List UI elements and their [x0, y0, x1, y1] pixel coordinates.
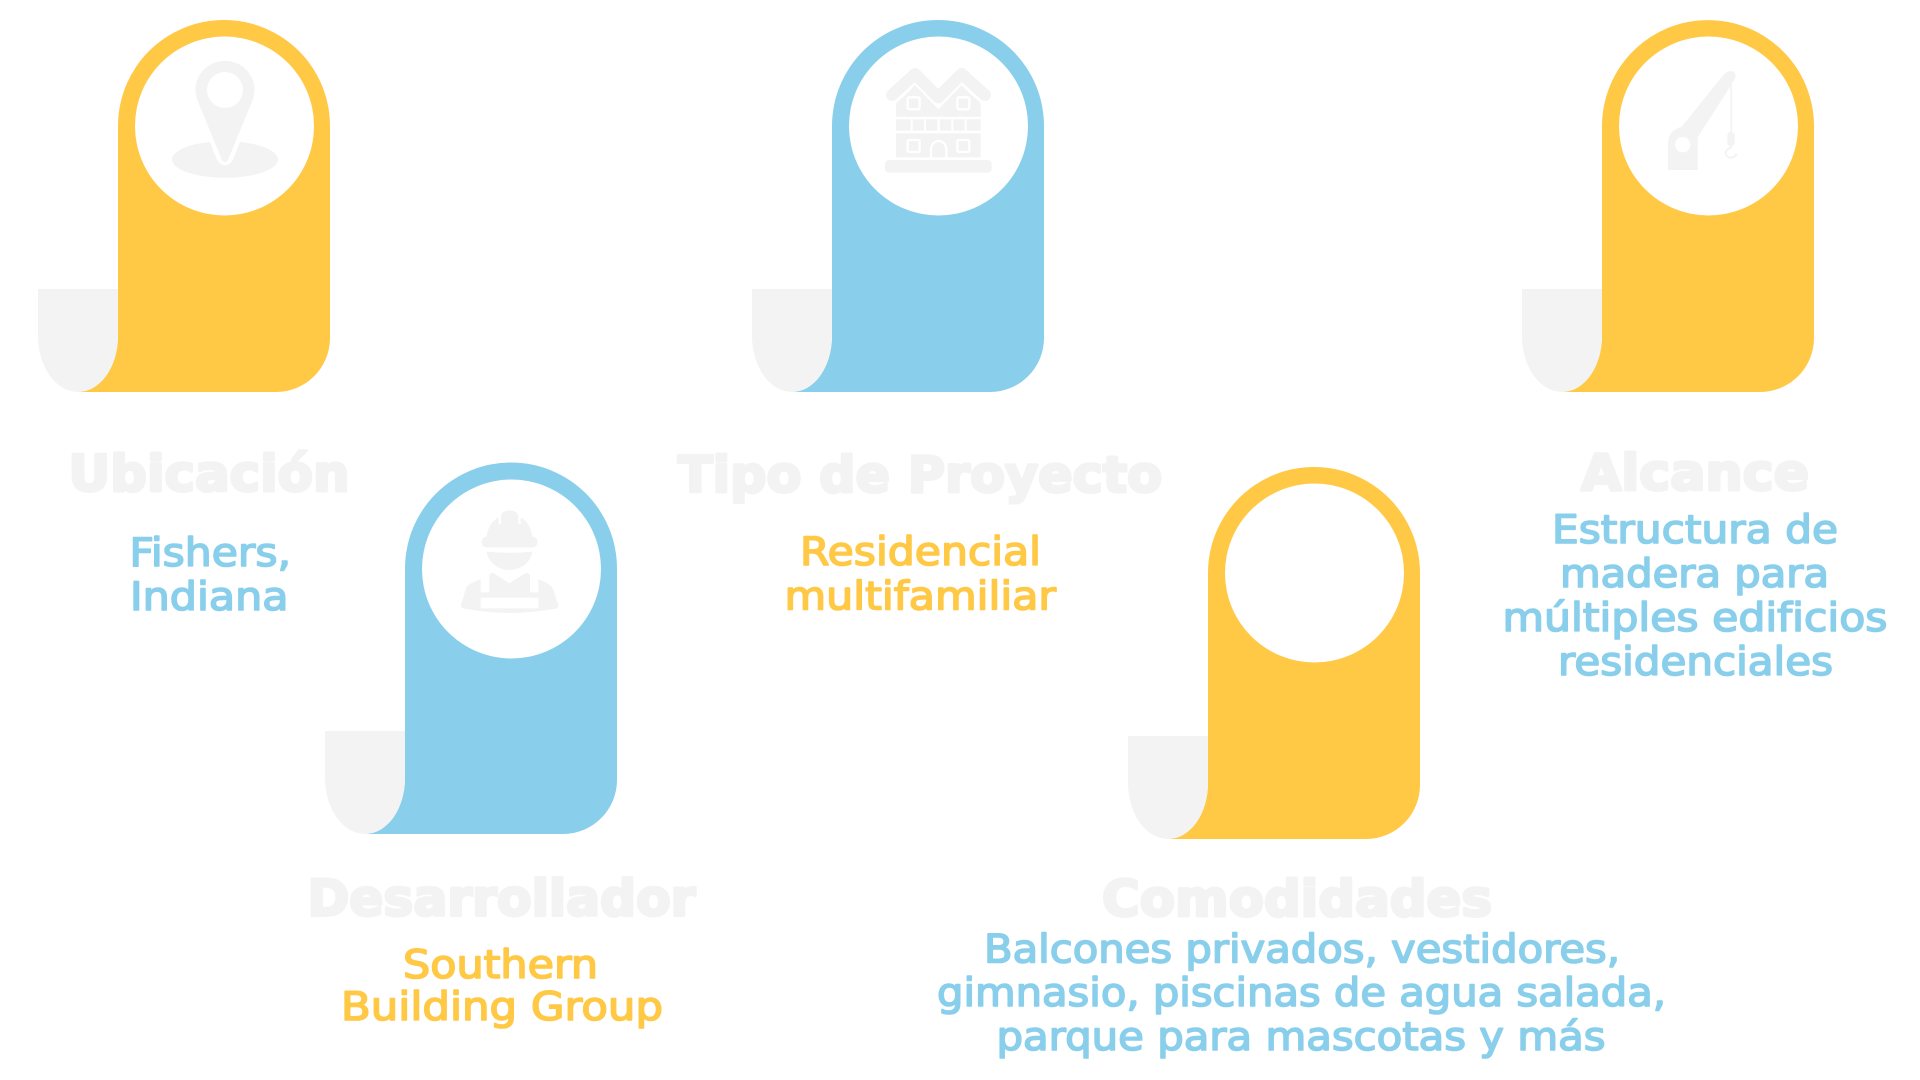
- text: Estructura de madera: múltiples edificios: [1502, 596, 1888, 641]
- icon: construction worker: [461, 511, 558, 613]
- scroll flap: [38, 289, 118, 392]
- icon: crane: [1668, 71, 1736, 170]
- text: Balcones privados list: gimnasio, piscinas de agua salada,: [937, 971, 1666, 1016]
- text: Fishers, Indiana: [130, 531, 291, 620]
- icon circle: [849, 36, 1028, 216]
- icon: house: [885, 74, 992, 173]
- panel: Tipo de Proyecto card: [752, 20, 1044, 392]
- icon circle: [135, 36, 314, 216]
- heading: Tipo de Proyecto: Tipo de Proyecto: [678, 446, 1162, 504]
- icon: map pin: [172, 60, 278, 178]
- panel: Desarrollador card: [325, 463, 617, 834]
- text: Southern Building Group: [341, 943, 663, 1030]
- text: Residencial multifamiliar: [784, 530, 1057, 620]
- scroll shape: [792, 20, 1044, 392]
- text: Balcones privados list: parque para mascotas y más: [996, 1015, 1606, 1060]
- heading: Ubicación: Ubicación: [68, 445, 350, 503]
- icon circle: [422, 480, 601, 658]
- scroll shape: [1168, 467, 1420, 839]
- panel: Comodidades card: [1128, 467, 1420, 839]
- text: Southern Building Group: Building Group: [341, 985, 663, 1030]
- text: Residencial multifamiliar: multifamiliar: [784, 574, 1057, 620]
- scroll shape: [365, 463, 617, 834]
- panel: Ubicación card: [38, 20, 330, 392]
- icon circle: [1225, 484, 1404, 662]
- text: Estructura de madera: [1502, 508, 1888, 685]
- text: Southern Building Group: Southern: [403, 943, 598, 988]
- scroll flap: [325, 731, 405, 834]
- panel: Alcance card: [1522, 20, 1814, 392]
- text: Fishers, Indiana: Fishers,: [130, 531, 291, 576]
- heading: Comodidades: Comodidades: [1102, 870, 1492, 928]
- text: Balcones privados list: [937, 928, 1666, 1060]
- text: Fishers, Indiana: Indiana: [130, 575, 288, 620]
- text: Estructura de madera: madera para: [1560, 552, 1829, 597]
- text: Residencial multifamiliar: Residencial: [800, 530, 1041, 575]
- text: Estructura de madera: Estructura de: [1552, 508, 1838, 553]
- scroll flap: [752, 289, 832, 392]
- icon circle: [1619, 36, 1798, 216]
- heading: Alcance: Alcance: [1581, 444, 1809, 502]
- text: Balcones privados list: Balcones privados, vestidores,: [984, 928, 1620, 972]
- scroll flap: [1522, 289, 1602, 392]
- scroll flap: [1128, 736, 1208, 839]
- scroll shape: [78, 20, 330, 392]
- text: Estructura de madera: residenciales: [1558, 640, 1833, 685]
- heading: Desarrollador: Desarrollador: [308, 870, 696, 928]
- scroll shape: [1562, 20, 1814, 392]
